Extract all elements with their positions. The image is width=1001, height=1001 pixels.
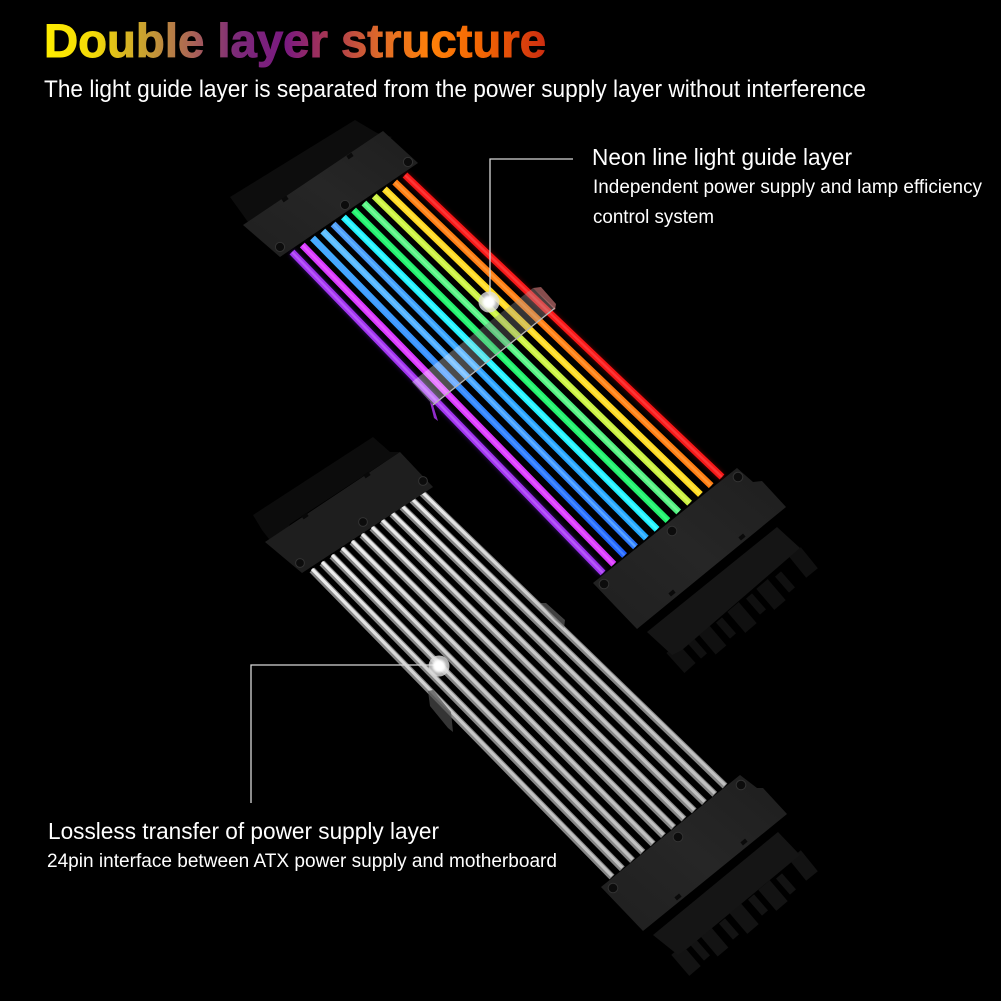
upper connector screws bbox=[296, 477, 427, 567]
callout description: 24pin interface between ATX power supply and motherboard bbox=[47, 851, 557, 872]
small clip, upper right bbox=[540, 603, 565, 628]
wire highlights bbox=[292, 175, 722, 573]
small clip, lower left bbox=[428, 690, 453, 732]
callout description bbox=[593, 177, 982, 228]
lower connector pins bbox=[677, 855, 812, 971]
transparent wire clip bbox=[412, 287, 556, 421]
lower connector body bbox=[647, 527, 800, 655]
callout heading: Neon line light guide layer bbox=[592, 144, 852, 170]
lower connector screws bbox=[599, 472, 743, 589]
marker dot: power layer bbox=[428, 656, 450, 676]
upper connector screws bbox=[275, 157, 413, 252]
lower connector notches bbox=[668, 534, 746, 596]
silver wires bbox=[312, 493, 725, 877]
lower connector plate bbox=[601, 775, 787, 931]
neon RGB cable: light guide layer bbox=[230, 120, 812, 668]
subtitle: The light guide layer is separated from the power supply layer without interference bbox=[44, 76, 866, 103]
callout: lossless transfer of power supply layer bbox=[47, 818, 557, 872]
upper connector plate bbox=[243, 131, 418, 257]
callout: neon line light guide layer bbox=[592, 144, 982, 228]
lower connector pins bbox=[672, 552, 812, 668]
marker dot: neon layer bbox=[478, 292, 500, 312]
lower connector plate bbox=[593, 468, 786, 629]
lower connector body bbox=[653, 832, 800, 955]
callout heading: Lossless transfer of power supply layer bbox=[48, 818, 439, 844]
upper connector notches bbox=[301, 472, 371, 519]
upper connector plate bbox=[265, 452, 433, 573]
silver cable: power supply layer bbox=[253, 437, 812, 971]
leader line: neon layer bbox=[490, 159, 573, 302]
lower connector screws bbox=[608, 780, 746, 893]
rainbow neon wires bbox=[292, 175, 722, 573]
upper connector notches bbox=[281, 153, 354, 202]
title: Double layer structure bbox=[44, 14, 546, 67]
lower connector notches bbox=[674, 839, 748, 900]
callout description: control system bbox=[593, 207, 714, 228]
callout description: Independent power supply and lamp efficiency bbox=[593, 177, 982, 198]
wire glow bbox=[292, 175, 722, 573]
silver wire highlights bbox=[312, 492, 725, 876]
rear block of upper connector bbox=[230, 120, 392, 232]
rear block of upper connector bbox=[253, 437, 400, 548]
leader line: power layer bbox=[251, 665, 436, 803]
